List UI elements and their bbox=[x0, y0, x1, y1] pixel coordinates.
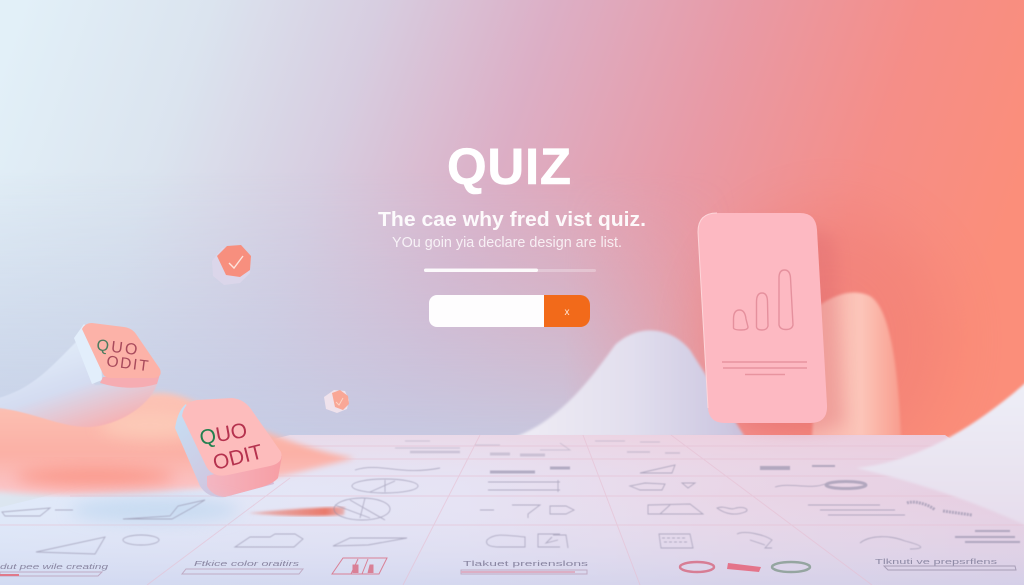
title: QUIZ bbox=[447, 138, 571, 195]
floor caption: centre: Tlakuet prerienslons bbox=[463, 559, 588, 568]
tube behind block one bbox=[0, 342, 157, 427]
floor input: centre left bbox=[182, 569, 303, 574]
subtitle: The cae why fred vist quiz. bbox=[378, 208, 646, 231]
floor caption: right: Tlknuti ve prepsrflens bbox=[875, 559, 998, 566]
block: QUO ODIT back bbox=[74, 323, 161, 388]
phone bar chart icon bbox=[734, 270, 793, 330]
icon row two bbox=[355, 465, 835, 473]
floor input: left bbox=[0, 572, 102, 576]
phone text lines bbox=[722, 362, 807, 374]
floor caption: centre left: Ftkice color oraitirs bbox=[194, 559, 299, 568]
block one label: QUO bbox=[96, 337, 138, 359]
floor caption: left: dut pee wile creating bbox=[0, 562, 109, 571]
floor input: right bbox=[884, 566, 1016, 570]
progress bar bbox=[424, 268, 596, 272]
block one label line two: ODIT bbox=[106, 353, 150, 375]
description: YOu goin yia declare design are list. bbox=[392, 235, 622, 251]
button glyph: x bbox=[564, 307, 570, 318]
peach wave under the blocks bbox=[0, 393, 355, 494]
floor input: centre bbox=[461, 570, 587, 574]
phone card bbox=[698, 213, 845, 431]
peach wave shading bbox=[15, 411, 200, 487]
background hill: white wave bbox=[515, 330, 745, 437]
floor line icons bbox=[2, 441, 1020, 554]
floating check badge bbox=[212, 245, 251, 285]
input and orange button bbox=[429, 295, 590, 327]
icon row three bbox=[352, 479, 866, 493]
icon row four bbox=[2, 498, 972, 520]
blue shadow on floor bbox=[70, 497, 240, 523]
icon row five bbox=[36, 531, 1020, 554]
background hill: pink arch bbox=[812, 293, 901, 437]
red smear on floor bbox=[248, 507, 345, 516]
chart icon red bbox=[332, 558, 387, 574]
floating small badge bbox=[324, 390, 349, 413]
rings and red tag bbox=[680, 562, 810, 572]
icon row one bbox=[395, 441, 680, 455]
block two label line two: ODIT bbox=[211, 440, 265, 475]
block two label: QUO bbox=[198, 419, 249, 450]
floor with grid bbox=[0, 435, 1024, 585]
block: QUO ODIT front bbox=[175, 398, 282, 497]
white background hill: right wave bbox=[856, 370, 1024, 532]
